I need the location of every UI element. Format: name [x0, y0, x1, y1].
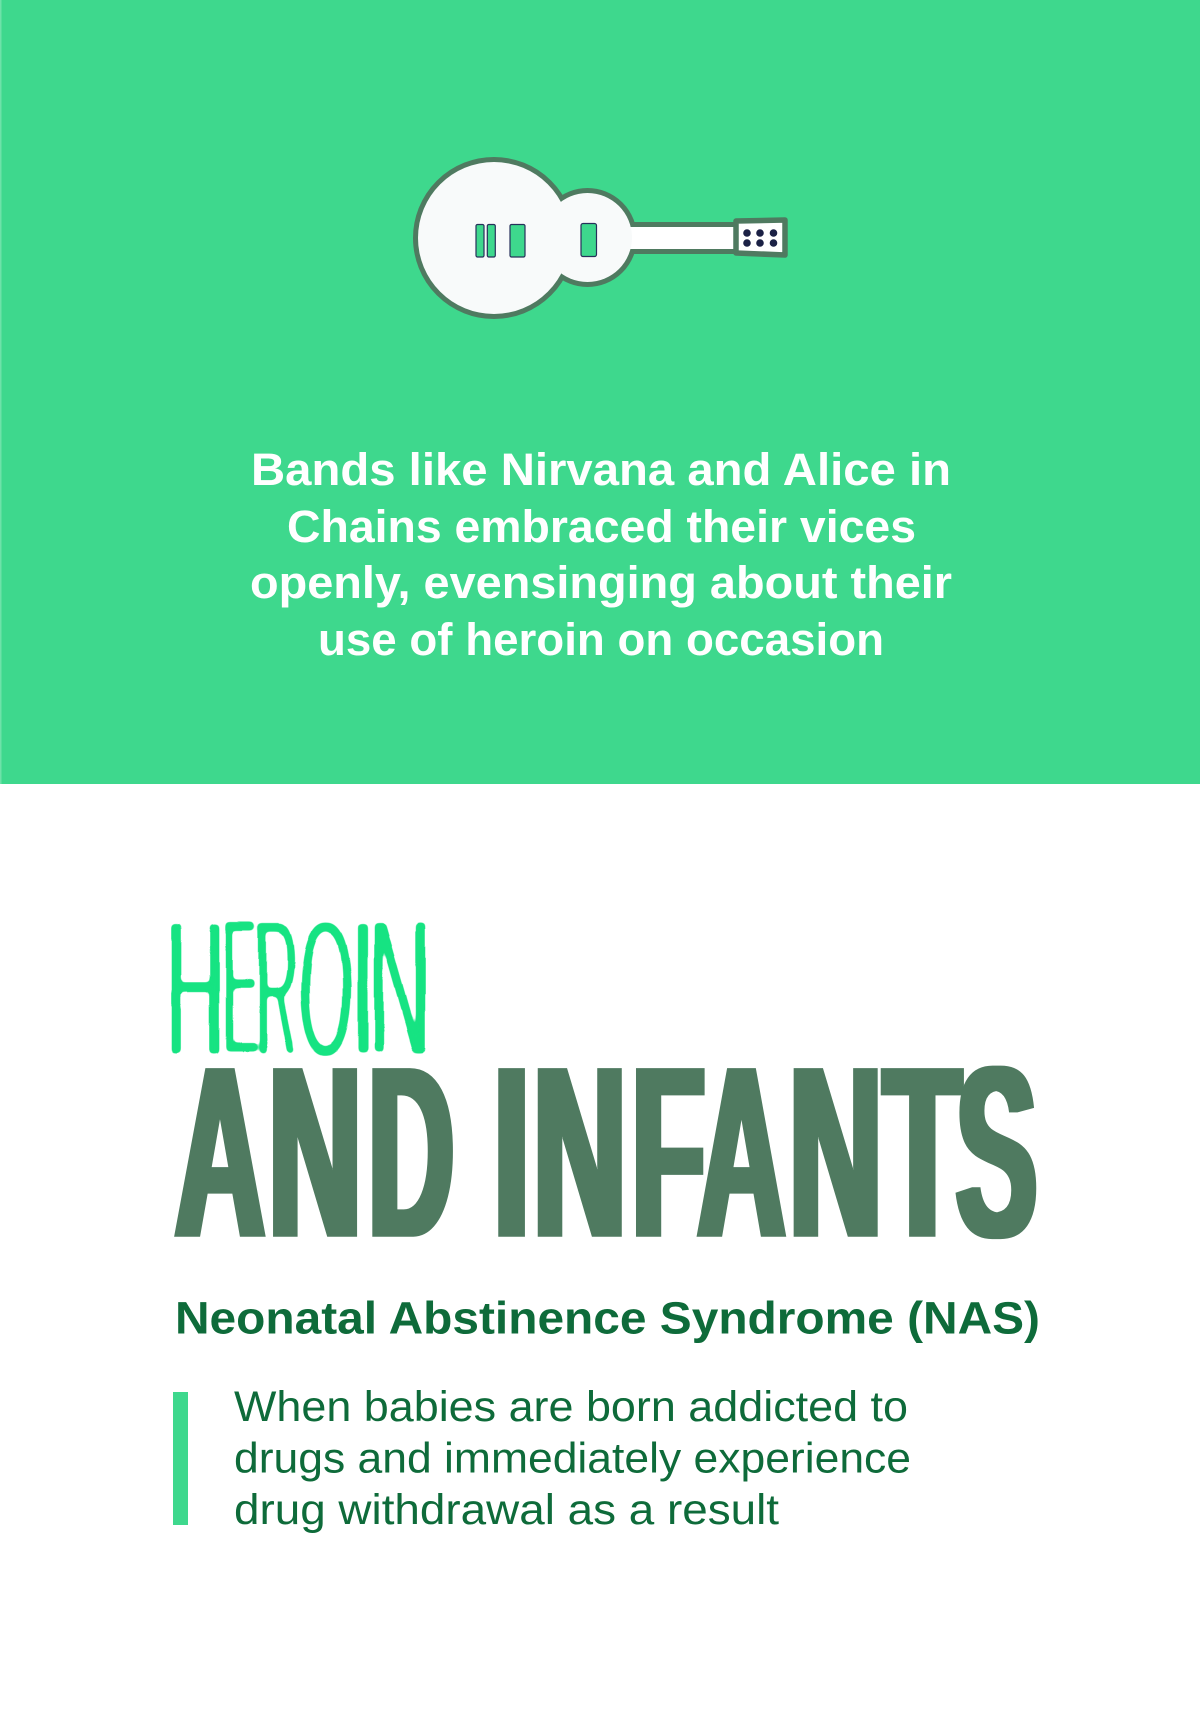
text block: NAS definition: When babies are born addicted to [234, 1383, 908, 1431]
infographic page: S [956, 1015, 1037, 1289]
heading: AND INFANTS: N [533, 1015, 626, 1289]
icon: guitar [416, 160, 785, 316]
heading: AND INFANTS: D [368, 1015, 454, 1289]
heading: HEROIN [166, 876, 432, 1099]
heading: HEROIN: E [222, 876, 258, 1096]
heading: AND INFANTS: F [632, 1015, 705, 1289]
accent bar [173, 1392, 188, 1525]
text block: NAS definition: drugs and immediately experience [234, 1434, 911, 1482]
text block: NAS definition [234, 1383, 911, 1534]
heading: HEROIN: H [166, 879, 225, 1099]
heading: AND INFANTS: I [494, 1015, 530, 1289]
heading: HEROIN: I [350, 878, 374, 1098]
heading: HEROIN: R [255, 878, 298, 1098]
text block: bands statement: openly, evensinging about their [250, 557, 952, 608]
heading: AND INFANTS: N [789, 1015, 882, 1289]
heading: AND INFANTS: N [268, 1015, 362, 1289]
text block: bands statement [250, 444, 952, 665]
heading: HEROIN: O [299, 879, 353, 1099]
heading: AND INFANTS: T [883, 1015, 961, 1289]
panel: green band [0, 0, 1200, 784]
text block: bands statement: Bands like Nirvana and Alice in [251, 444, 951, 495]
text block: bands statement: Chains embraced their vices [287, 501, 916, 552]
heading: AND INFANTS: A [698, 1015, 786, 1289]
heading: AND INFANTS: A [175, 1015, 265, 1289]
text block: NAS definition: drug withdrawal as a result [234, 1486, 779, 1534]
heading: AND INFANTS [175, 1015, 1037, 1289]
infographic page: N [368, 877, 432, 1097]
subheading: Neonatal Abstinence Syndrome: Neonatal Abstinence Syndrome (NAS) [175, 1292, 1040, 1344]
text block: bands statement: use of heroin on occasion [318, 614, 884, 665]
